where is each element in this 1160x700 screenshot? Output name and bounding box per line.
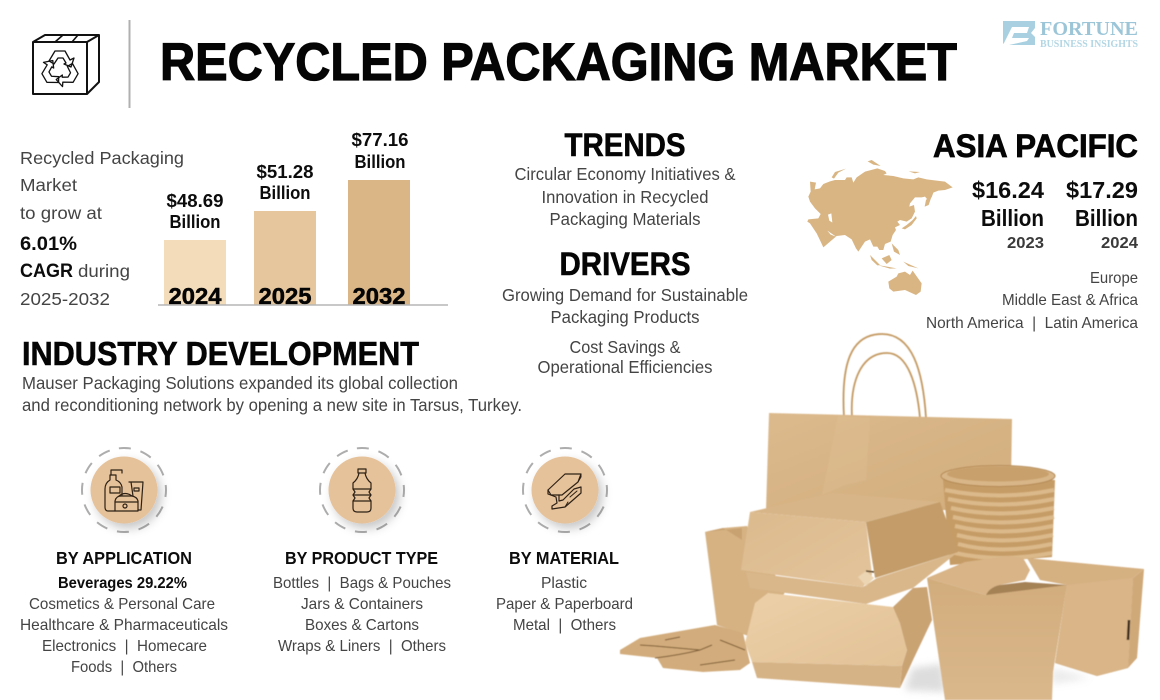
- text block: CAGR statement: during: [78, 261, 130, 281]
- front right carton: [927, 556, 1067, 700]
- bar 2032: 2032: [352, 283, 406, 309]
- panel: Asia Pacific figures: [926, 128, 1138, 332]
- panel: industry development: Mauser Packaging Solutions expanded its global collection: [22, 373, 458, 393]
- panel: drivers: Cost Savings &: [570, 337, 681, 357]
- panel: drivers: [502, 246, 748, 377]
- value 2024: [1066, 177, 1138, 252]
- panel: by application: Cosmetics & Personal Care: [29, 596, 215, 613]
- text block: CAGR statement: Market: [20, 175, 77, 195]
- stacked cups: [941, 466, 1055, 565]
- panel: drivers: Operational Efficiencies: [538, 357, 713, 377]
- text block: CAGR statement: 2025-2032: [20, 289, 110, 309]
- value 2024: 2024: [1101, 235, 1138, 252]
- left carton: [705, 526, 785, 640]
- lower burger box: [745, 587, 932, 688]
- other regions: Europe: [1090, 270, 1138, 287]
- panel: Asia Pacific figures: ASIA PACIFIC: [933, 128, 1138, 164]
- panel: by material: Metal | Others: [513, 617, 616, 634]
- bar 2032: $77.16: [352, 130, 408, 150]
- icon: steel beam: [518, 443, 612, 537]
- panel: by product type: Boxes & Cartons: [305, 617, 419, 634]
- other regions: North America | Latin America: [926, 315, 1138, 332]
- panel: trends: TRENDS: [564, 127, 686, 163]
- panel: industry development: [22, 335, 522, 415]
- value 2023: Billion: [981, 205, 1044, 231]
- panel: trends: Circular Economy Initiatives &: [514, 164, 736, 184]
- bag handles: [843, 334, 926, 418]
- flat cartons: [620, 625, 750, 672]
- panel: trends: Packaging Materials: [550, 209, 701, 229]
- panel: by application: Electronics | Homecare: [42, 638, 207, 655]
- text block: CAGR statement: 6.01%: [20, 234, 77, 255]
- map: Asia Pacific: [807, 160, 953, 295]
- panel: trends: Innovation in Recycled: [542, 187, 708, 207]
- value 2024: Billion: [1075, 205, 1138, 231]
- bar 2025: [254, 162, 316, 309]
- bar 2024: Billion: [170, 212, 220, 232]
- panel: drivers: DRIVERS: [560, 246, 690, 282]
- icon: recycled box: [33, 35, 99, 94]
- panel: industry development: INDUSTRY DEVELOPMENT: [22, 335, 419, 372]
- logo: Fortune Business Insights: FORTUNE: [1040, 18, 1138, 40]
- upper burger box: [741, 493, 958, 604]
- panel: by material: [496, 443, 633, 634]
- bar 2025: 2025: [258, 283, 312, 309]
- value 2023: $16.24: [972, 177, 1044, 203]
- panel: by product type: Jars & Containers: [301, 596, 423, 613]
- panel: by product type: Bottles | Bags & Pouches: [273, 575, 451, 592]
- bar chart: market size: [158, 130, 448, 309]
- rear right carton: [1027, 558, 1144, 676]
- value 2024: $17.29: [1066, 177, 1138, 203]
- other regions: Middle East & Africa: [1002, 292, 1138, 309]
- other regions: [926, 270, 1138, 332]
- value 2023: [972, 177, 1044, 252]
- bar 2032: [348, 130, 410, 309]
- value 2023: 2023: [1007, 235, 1044, 252]
- text block: CAGR statement: [20, 148, 184, 309]
- logo: Fortune Business Insights: BUSINESS INSIGHTS: [1040, 38, 1138, 50]
- logo: Fortune Business Insights: [1003, 18, 1138, 50]
- panel: by product type: BY PRODUCT TYPE: [285, 548, 438, 568]
- panel: by application: Foods | Others: [71, 659, 177, 676]
- panel: by application: [20, 443, 228, 676]
- bar 2024: 2024: [168, 283, 222, 309]
- text block: CAGR statement: Recycled Packaging: [20, 148, 184, 168]
- panel: by product type: Wraps & Liners | Others: [278, 638, 446, 655]
- panel: by application: Healthcare & Pharmaceuticals: [20, 617, 228, 634]
- bar 2025: Billion: [260, 183, 310, 203]
- divider: [128, 20, 130, 108]
- icon: cosmetics: [77, 443, 171, 537]
- panel: drivers: Packaging Products: [550, 307, 700, 327]
- icon: bottle: [315, 443, 409, 537]
- bar 2025: $51.28: [256, 162, 314, 182]
- panel: by material: Paper & Paperboard: [496, 596, 633, 613]
- title: RECYCLED PACKAGING MARKET: [160, 33, 957, 92]
- panel: by material: Plastic: [541, 575, 587, 592]
- panel: by material: BY MATERIAL: [509, 548, 619, 568]
- illustration: kraft paper packaging: [620, 334, 1144, 700]
- bar 2024: $48.69: [166, 191, 224, 211]
- panel: trends: [514, 127, 736, 229]
- panel: industry development: and reconditioning network by opening a new site in Tarsus, Turkey.: [22, 395, 522, 415]
- bar 2024: [164, 191, 226, 309]
- text block: CAGR statement: to grow at: [20, 203, 102, 223]
- text block: CAGR statement: CAGR: [20, 261, 73, 282]
- panel: by product type: [273, 443, 451, 655]
- bar 2032: Billion: [354, 152, 406, 172]
- paper bag: [766, 413, 1012, 510]
- panel: drivers: Growing Demand for Sustainable: [502, 285, 748, 305]
- panel: by application: Beverages 29.22%: [58, 575, 187, 592]
- panel: by application: BY APPLICATION: [56, 548, 192, 568]
